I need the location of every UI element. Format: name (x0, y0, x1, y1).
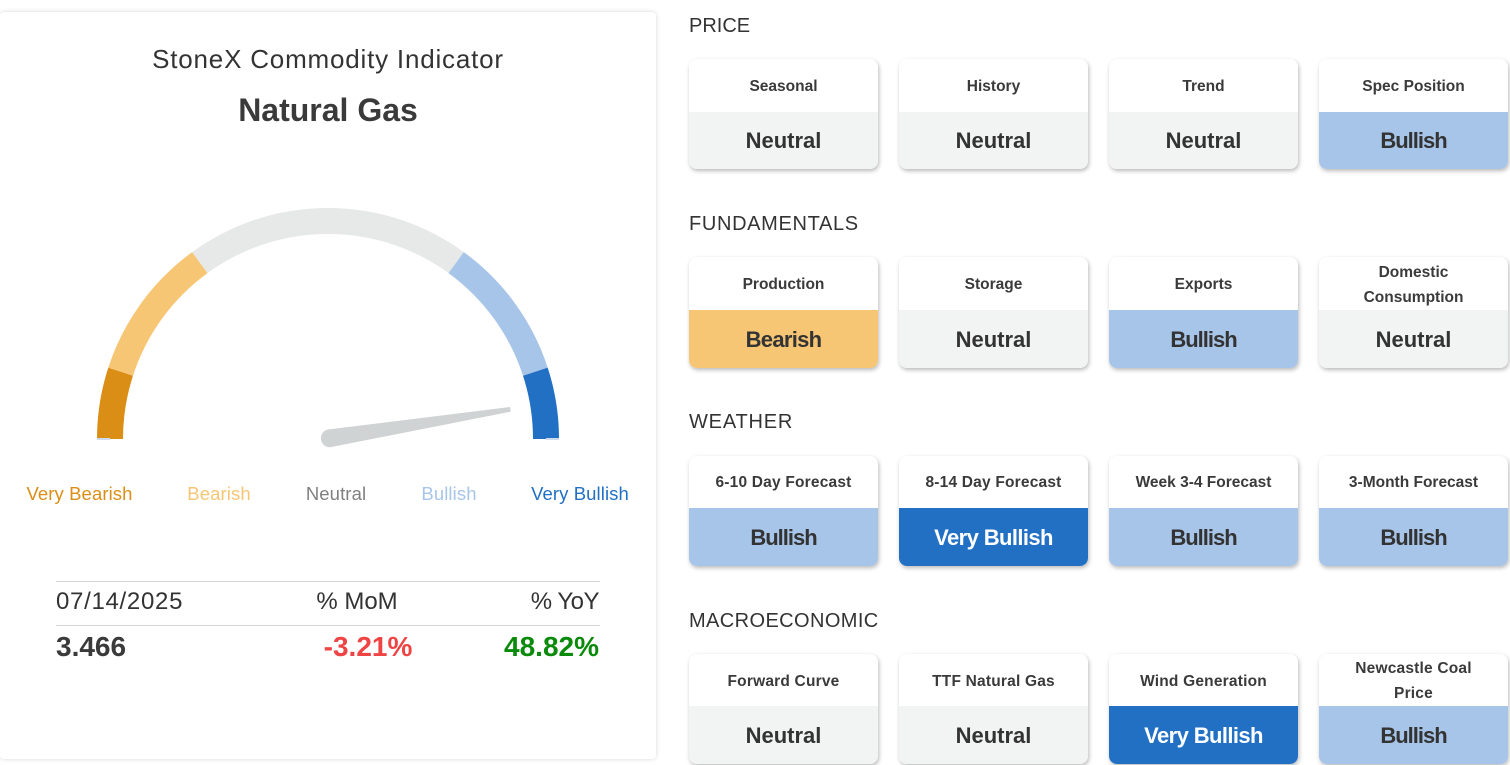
card: 8-14 day forecast: Very Bullish (934, 525, 1053, 550)
card: newcastle coal price (1319, 654, 1508, 764)
card: exports (1109, 257, 1298, 368)
card: production (689, 257, 878, 368)
card: ttf natural gas (899, 654, 1088, 764)
legend: neutral: Neutral (306, 483, 366, 504)
card: storage: Storage (965, 276, 1022, 293)
card: forward curve: Forward Curve (728, 672, 840, 690)
MoM value: -3.21% (324, 631, 412, 662)
card: seasonal (689, 59, 878, 169)
stats table (56, 581, 600, 666)
card: storage (899, 257, 1088, 368)
card: 6-10 day forecast: Bullish (750, 525, 817, 550)
card: domestic consumption: Domestic (1379, 264, 1448, 280)
left end tick (97, 438, 110, 440)
card: ttf natural gas: TTF Natural Gas (932, 672, 1055, 690)
very bearish arc (97, 368, 133, 439)
card: production: Production (743, 276, 824, 293)
card: 6-10 day forecast (689, 456, 878, 566)
bearish arc (108, 252, 208, 376)
heading: commodity name: Natural Gas (238, 92, 418, 128)
card: newcastle coal price: Price (1394, 685, 1433, 702)
card: wind generation (1109, 654, 1298, 764)
card: week 3-4 forecast (1109, 456, 1298, 566)
right end tick (546, 438, 559, 440)
gauge chart (97, 208, 559, 448)
title: StoneX Commodity Indicator (152, 44, 504, 74)
card: exports: Exports (1175, 276, 1232, 293)
card: newcastle coal price: Newcastle Coal (1355, 660, 1472, 677)
card: trend (1109, 59, 1298, 169)
card: 8-14 day forecast: 8-14 Day Forecast (925, 474, 1062, 490)
legend: bullish: Bullish (421, 483, 477, 504)
price value: 3.466 (56, 631, 126, 662)
card: history: History (967, 78, 1020, 95)
legend: very bullish: Very Bullish (531, 483, 629, 504)
neutral arc (192, 208, 464, 273)
legend: very bearish: Very Bearish (26, 483, 133, 504)
card: week 3-4 forecast: Bullish (1170, 525, 1237, 550)
row divider (56, 625, 600, 626)
card: domestic consumption: Neutral (1376, 327, 1451, 352)
card: domestic consumption: Consumption (1364, 288, 1463, 306)
card: domestic consumption (1319, 257, 1508, 368)
card: 3-month forecast (1319, 456, 1508, 566)
card: 3-month forecast: 3-Month Forecast (1349, 474, 1478, 490)
card: forward curve (689, 654, 878, 764)
heading: fundamentals: FUNDAMENTALS (689, 213, 859, 235)
card: history (899, 59, 1088, 169)
card: spec position (1319, 59, 1508, 169)
panel: gauge (0, 12, 656, 759)
card: forward curve: Neutral (746, 723, 821, 748)
legend (26, 483, 629, 504)
card: 8-14 day forecast (899, 456, 1088, 566)
card: ttf natural gas: Neutral (956, 723, 1031, 748)
needle (321, 407, 511, 447)
legend: bearish: Bearish (187, 483, 251, 504)
bullish arc (448, 252, 548, 376)
card: seasonal: Neutral (746, 128, 821, 152)
card: spec position: Spec Position (1362, 78, 1465, 95)
card: newcastle coal price: Bullish (1380, 723, 1447, 748)
card: history: Neutral (956, 128, 1031, 152)
YoY header: % YoY (531, 588, 599, 615)
card: spec position: Bullish (1380, 128, 1447, 152)
card: wind generation: Wind Generation (1140, 672, 1267, 690)
card: wind generation: Very Bullish (1144, 723, 1263, 748)
very bullish arc (523, 368, 559, 439)
heading: weather: WEATHER (689, 411, 793, 433)
card: trend: Neutral (1166, 128, 1241, 152)
date: 07/14/2025 (56, 588, 183, 615)
card: exports: Bullish (1170, 327, 1237, 352)
card: storage: Neutral (956, 327, 1031, 352)
heading: price: PRICE (689, 15, 750, 37)
card: seasonal: Seasonal (749, 78, 818, 95)
MoM header: % MoM (316, 588, 398, 615)
card: 6-10 day forecast: 6-10 Day Forecast (715, 474, 852, 490)
card: 3-month forecast: Bullish (1380, 525, 1447, 550)
card: week 3-4 forecast: Week 3-4 Forecast (1136, 474, 1271, 490)
card: trend: Trend (1182, 78, 1225, 95)
heading: macroeconomic: MACROECONOMIC (689, 610, 879, 632)
card: production: Bearish (746, 327, 821, 352)
YoY value: 48.82% (504, 631, 599, 662)
